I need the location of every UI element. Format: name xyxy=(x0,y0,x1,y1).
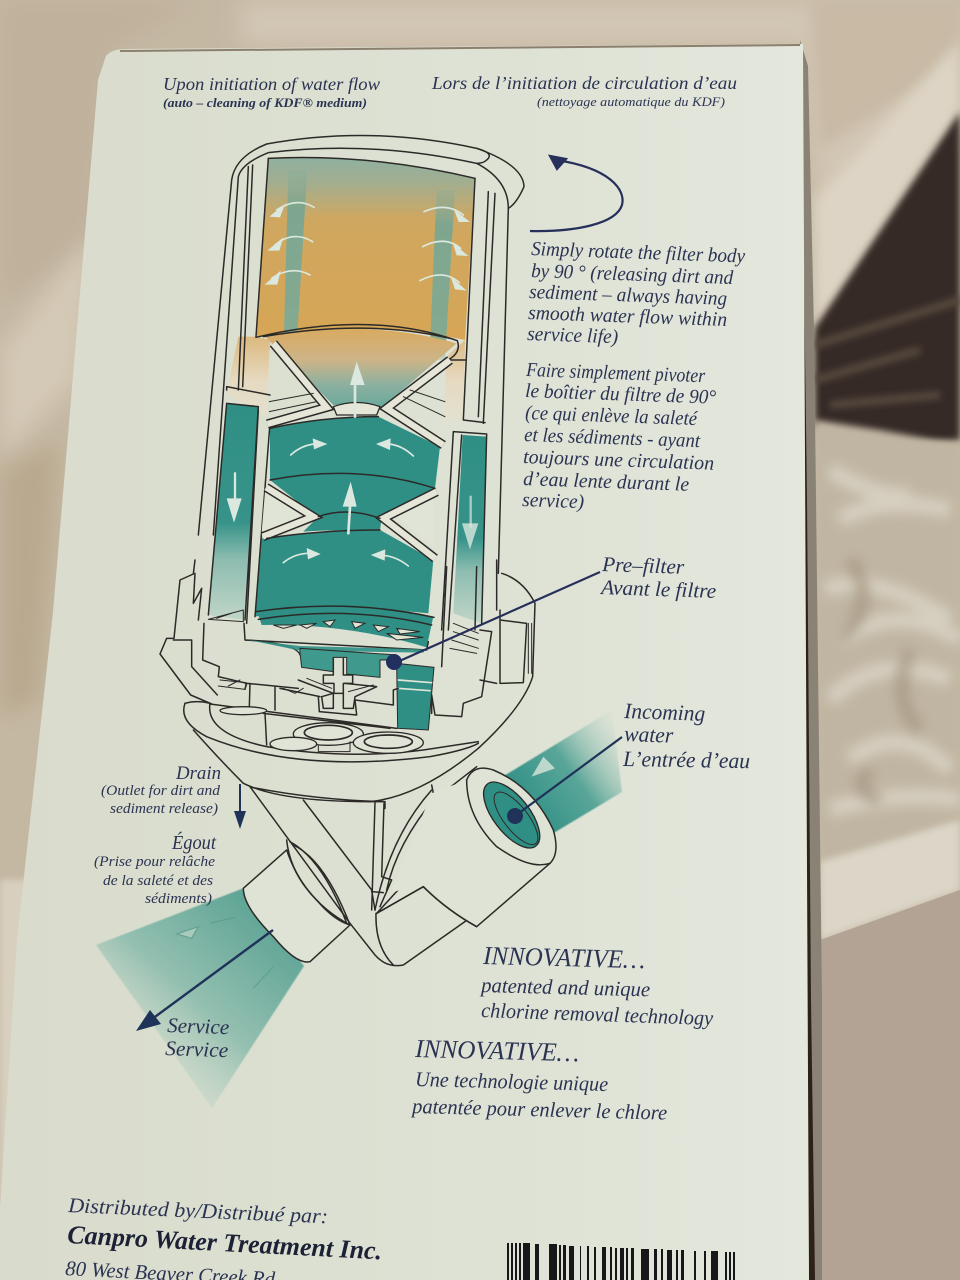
service outlet pipe xyxy=(243,840,350,962)
innovative french: patentée pour enlever le chlore xyxy=(410,1094,667,1125)
label: incoming water: Incoming xyxy=(623,698,706,726)
instructions french: et les sédiments - ayant xyxy=(524,424,701,452)
hub middle xyxy=(303,512,382,532)
rotation arrow xyxy=(530,156,623,231)
distributor text: Distributed by/Distribué par: xyxy=(67,1193,329,1228)
baffle upper left xyxy=(267,343,327,424)
distributor text xyxy=(65,1193,383,1280)
right teal column xyxy=(453,435,487,623)
side beige zones xyxy=(227,337,465,423)
post bands xyxy=(398,680,432,691)
shell outlines xyxy=(198,135,524,630)
filter upper cutaway xyxy=(198,135,524,630)
header text english xyxy=(163,74,380,110)
curved arrows orange chamber xyxy=(265,203,470,291)
arrow down left column xyxy=(227,473,242,523)
header text french: Lors de l’initiation de circulation d’eau xyxy=(431,73,737,93)
barcode xyxy=(507,1243,735,1280)
faint arrow in incoming beam xyxy=(532,757,555,777)
label: pre-filter: Avant le filtre xyxy=(599,575,717,603)
divider upper chamber xyxy=(270,417,435,488)
hub outline xyxy=(267,512,380,538)
incoming inlet pipe xyxy=(377,768,556,927)
disc rim and spokes xyxy=(244,606,434,655)
left housing flange xyxy=(160,560,247,704)
baffle lower left xyxy=(262,487,313,537)
label: egout: de la saleté et des xyxy=(103,873,213,889)
innovative french xyxy=(410,1034,667,1125)
cone xyxy=(265,329,457,407)
valve rings xyxy=(220,707,423,753)
teal beam: service water xyxy=(96,888,304,1108)
arrows up in centre xyxy=(343,362,365,533)
instructions french: Faire simplement pivoter xyxy=(525,359,706,387)
left teal column xyxy=(208,403,258,620)
instructions english xyxy=(527,238,746,348)
instructions french: le boîtier du filtre de 90° xyxy=(525,380,716,409)
Y connector body xyxy=(250,767,550,966)
cone rim xyxy=(256,324,465,361)
instructions french: toujours une circulation xyxy=(523,446,714,475)
innovative english: INNOVATIVE… xyxy=(482,941,646,974)
curved arrows teal chambers xyxy=(283,438,413,566)
distributor text: Canpro Water Treatment Inc. xyxy=(67,1220,383,1265)
lower teal chamber xyxy=(255,530,433,617)
innovative english: chlorine removal technology xyxy=(481,998,714,1030)
hub top xyxy=(333,402,380,415)
baffle lower right xyxy=(383,492,437,558)
arrow: service water out xyxy=(136,930,273,1031)
header text english: (auto – cleaning of KDF® medium) xyxy=(163,95,367,110)
housing floor xyxy=(210,683,432,745)
label: pre-filter xyxy=(599,552,717,603)
instructions french: (ce qui enlève la saleté xyxy=(525,402,699,430)
label: egout: sédiments) xyxy=(145,891,212,907)
green stripe left xyxy=(283,170,307,357)
label: drain: Drain xyxy=(175,763,221,784)
label: egout: Égout xyxy=(171,831,216,854)
label: service xyxy=(165,1013,230,1062)
instructions english: Simply rotate the filter body xyxy=(531,238,746,267)
label: drain xyxy=(101,763,221,817)
header text french xyxy=(431,73,737,109)
leader: pre-filter xyxy=(386,572,600,670)
header text english: Upon initiation of water flow xyxy=(163,74,380,94)
central cross xyxy=(283,658,377,708)
header text french: (nettoyage automatique du KDF) xyxy=(537,94,725,109)
instructions french xyxy=(522,359,716,513)
teal inlet post xyxy=(397,663,434,730)
green stripe right xyxy=(429,190,455,360)
upper teal chamber xyxy=(270,417,440,518)
label: incoming water: L’entrée d’eau xyxy=(622,746,750,773)
box side edge xyxy=(800,40,822,1280)
pre-filter disc xyxy=(257,605,433,647)
label: service: Service xyxy=(165,1036,229,1062)
instructions english: by 90 ° (releasing dirt and xyxy=(531,260,734,289)
right housing flange xyxy=(432,560,535,748)
innovative french: INNOVATIVE… xyxy=(414,1034,580,1067)
innovative french: Une technologie unique xyxy=(415,1067,608,1096)
label: incoming water: water xyxy=(624,721,674,748)
leader: incoming water xyxy=(507,737,622,824)
label: service: Service xyxy=(167,1013,230,1039)
filter base and connector xyxy=(160,560,556,988)
label: egout: (Prise pour relâche xyxy=(94,854,216,870)
left hatched detail xyxy=(208,610,246,689)
upper chamber: orange medium xyxy=(257,157,475,340)
instructions english: sediment – always having xyxy=(529,281,727,310)
teal beam: incoming water xyxy=(494,710,622,834)
dark gap along box edge xyxy=(802,200,815,1280)
label: egout xyxy=(94,831,216,907)
innovative english: patented and unique xyxy=(479,973,650,1001)
arrow down right column xyxy=(462,497,478,549)
right hatched detail xyxy=(450,623,532,673)
faint arrow strokes in service beam xyxy=(177,917,273,988)
instructions english: smooth water flow within xyxy=(528,302,727,331)
label: incoming water xyxy=(622,698,750,773)
arrow: drain xyxy=(234,784,246,829)
label: drain: (Outlet for dirt and xyxy=(101,783,221,799)
innovative english xyxy=(479,941,714,1030)
bowl xyxy=(184,702,478,802)
box top edge xyxy=(120,44,800,52)
label: drain: sediment release) xyxy=(110,801,218,817)
baffle upper right xyxy=(387,360,450,445)
teal hub xyxy=(300,648,397,677)
instructions french: service) xyxy=(522,489,585,513)
instructions english: service life) xyxy=(527,323,619,348)
label: pre-filter: Pre–filter xyxy=(601,552,685,579)
instructions french: d’eau lente durant le xyxy=(523,468,690,496)
